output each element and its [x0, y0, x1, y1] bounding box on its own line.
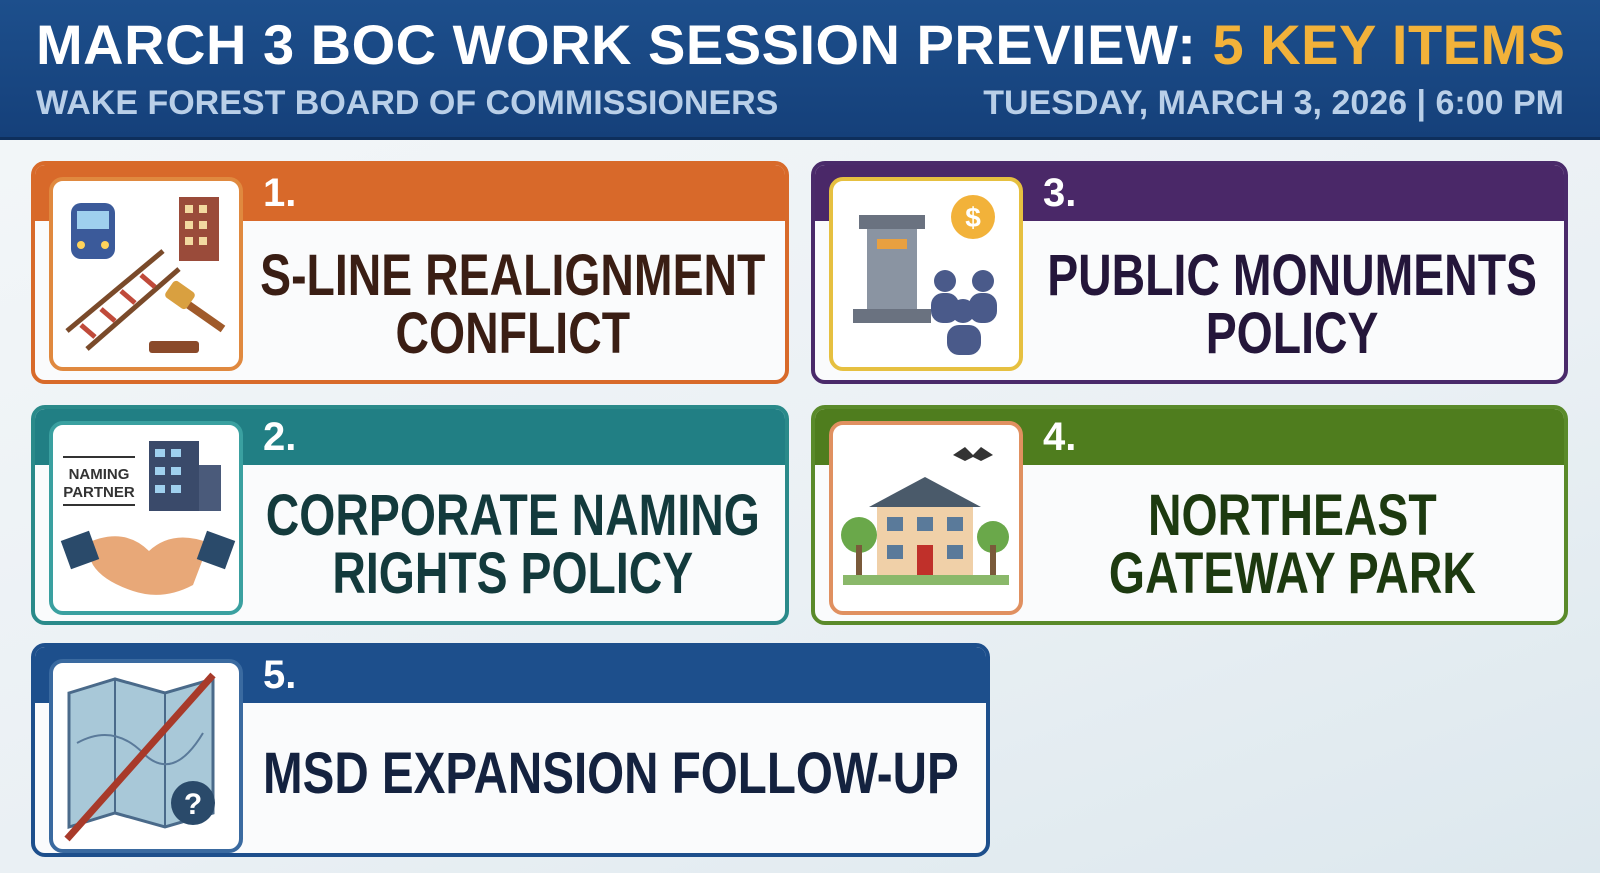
- icon: naming partner handshake: PARTNER: [63, 484, 135, 501]
- header: [0, 0, 1600, 140]
- item title: PUBLIC MONUMENTS: [1047, 243, 1537, 308]
- icon: crossed-out map: ?: [184, 788, 202, 821]
- panel: item 2: [31, 405, 789, 625]
- icon: train, tracks, gavel: [49, 177, 243, 371]
- icon: naming partner handshake: [49, 421, 243, 615]
- panel: item 2: 2.: [263, 415, 296, 459]
- icon: house with bat: [829, 421, 1023, 615]
- subtitle left: WAKE FOREST BOARD OF COMMISSIONERS: [36, 84, 778, 122]
- item title: NORTHEAST: [1148, 483, 1436, 548]
- item title: POLICY: [1206, 301, 1378, 366]
- panel: item 1: [31, 161, 789, 384]
- item title: [260, 243, 765, 366]
- panel: item 3: 3.: [1043, 171, 1076, 215]
- title: MARCH 3 BOC WORK SESSION PREVIEW: 5 KEY ITEMS: [36, 13, 1566, 76]
- icon: monument and crowd: [829, 177, 1023, 371]
- panel: item 3: [811, 161, 1568, 384]
- item title: CORPORATE NAMING: [265, 483, 760, 548]
- panel: item 1: 1.: [263, 171, 296, 215]
- item title: MSD EXPANSION FOLLOW-UP: [263, 741, 959, 806]
- item title: [1109, 483, 1476, 606]
- item title: [1047, 243, 1537, 366]
- subtitle right: TUESDAY, MARCH 3, 2026 | 6:00 PM: [983, 84, 1564, 122]
- icon: crossed-out map: [49, 659, 243, 853]
- item title: RIGHTS POLICY: [332, 541, 693, 606]
- item title: CONFLICT: [395, 301, 630, 366]
- panel: item 5: [31, 643, 990, 857]
- item title: [265, 483, 760, 606]
- item title: S-LINE REALIGNMENT: [260, 243, 765, 308]
- panel: item 5: 5.: [263, 653, 296, 697]
- panel: item 4: [811, 405, 1568, 625]
- icon: monument and crowd: $: [965, 202, 981, 233]
- icon: naming partner handshake: NAMING: [69, 466, 129, 483]
- panel: item 4: 4.: [1043, 415, 1076, 459]
- item title: GATEWAY PARK: [1109, 541, 1475, 606]
